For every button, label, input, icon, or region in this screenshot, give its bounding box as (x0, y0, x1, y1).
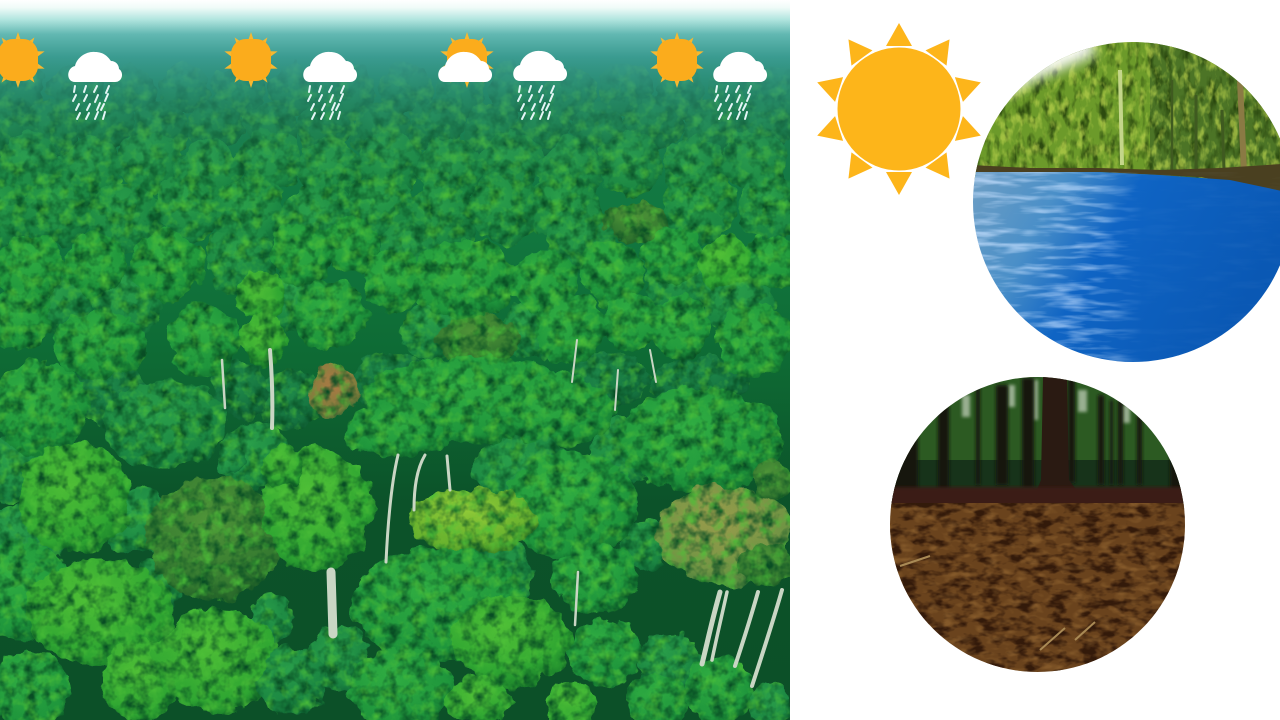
canopy: tree crowns (0, 62, 811, 720)
icon: sun 4 (649, 32, 705, 88)
photo circle: forest floor soil (888, 375, 1188, 675)
lake: forest bank (974, 42, 1280, 191)
soil: dark forest background (888, 375, 1188, 507)
canopy: pale tree trunks (222, 340, 782, 686)
icon: large sun (813, 23, 985, 195)
atmospheric haze at horizon (0, 0, 790, 166)
icon: rain cloud 2 (303, 52, 357, 119)
weather row: sun and rain icons (0, 32, 767, 119)
icon: sun behind cloud (438, 32, 495, 88)
icon: rain cloud 1 (68, 52, 122, 119)
lake: water (970, 172, 1280, 365)
icon: rain cloud 4 (713, 52, 767, 119)
icon: sun 1 (0, 32, 46, 88)
panel: aerial rainforest canopy (0, 0, 811, 720)
soil: leaf-litter ground (888, 503, 1188, 675)
icon: sun 2 (223, 32, 279, 88)
icon: rain cloud 3 (513, 51, 567, 119)
photo circle: forest lake (960, 30, 1280, 365)
